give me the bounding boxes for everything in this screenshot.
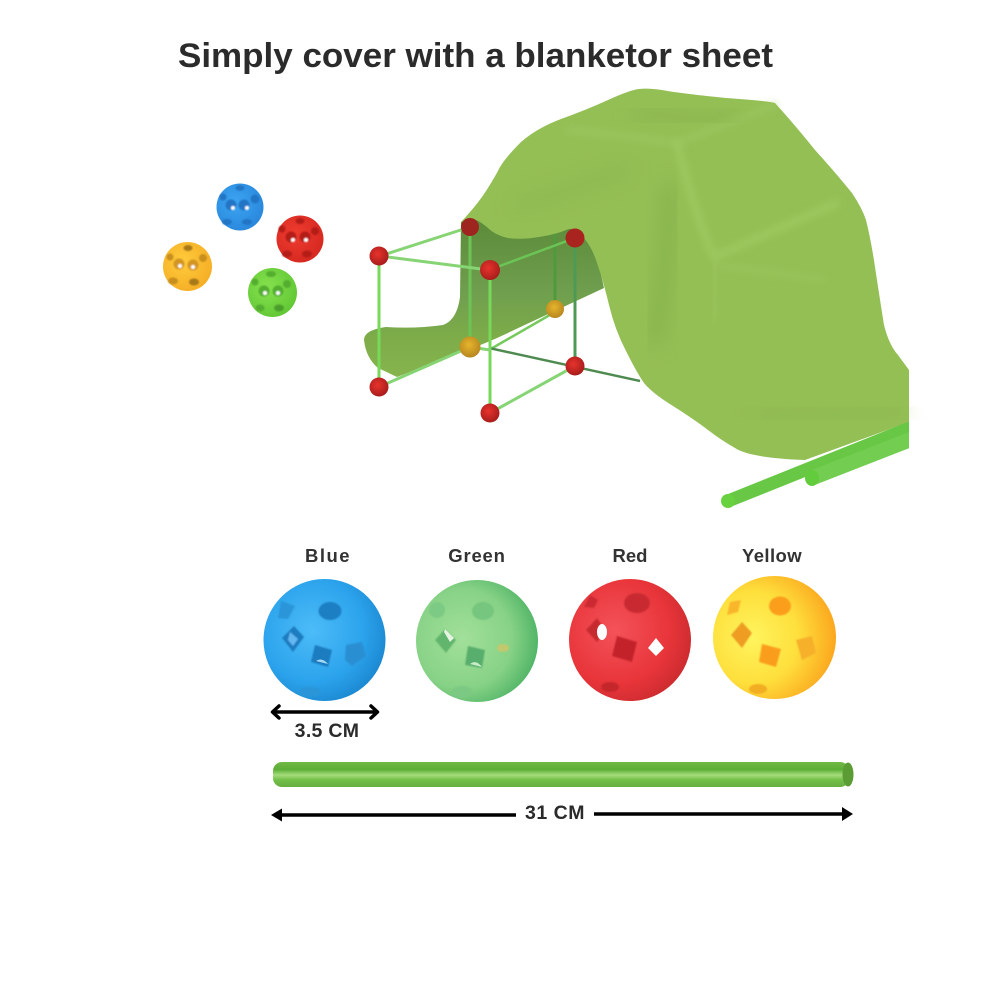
frame rods behind the sheet xyxy=(470,228,640,381)
loose rods xyxy=(721,422,909,508)
sheet folds xyxy=(520,105,900,417)
label: 31 CM: 31 CM xyxy=(525,802,585,824)
large yellow ball xyxy=(713,576,836,699)
icon: small yellow ball xyxy=(163,242,212,291)
label: 3.5 CM: 3.5 CM xyxy=(295,720,359,742)
large green ball xyxy=(416,580,538,702)
large blue ball xyxy=(264,579,386,701)
label: Yellow: Yellow xyxy=(742,545,802,566)
icon: small red ball xyxy=(276,216,324,262)
green rod xyxy=(273,762,854,787)
title: Simply cover with a blanketor sheet xyxy=(178,37,773,75)
illustration: fort frame covered by green sheet xyxy=(364,89,930,508)
icon: small green ball xyxy=(248,268,297,317)
frame connector balls xyxy=(370,218,584,422)
arrow: ball diameter xyxy=(272,706,378,718)
label: Green: Green xyxy=(448,545,506,566)
frame rods in front of the sheet xyxy=(379,227,575,413)
large red ball xyxy=(569,579,691,701)
sheet main body xyxy=(461,89,909,460)
label: Red: Red xyxy=(613,545,647,566)
icon: small blue ball xyxy=(216,184,264,230)
sheet inside, shaded xyxy=(364,215,604,377)
arrow: rod length xyxy=(271,807,853,822)
label: Blue: Blue xyxy=(305,545,351,566)
